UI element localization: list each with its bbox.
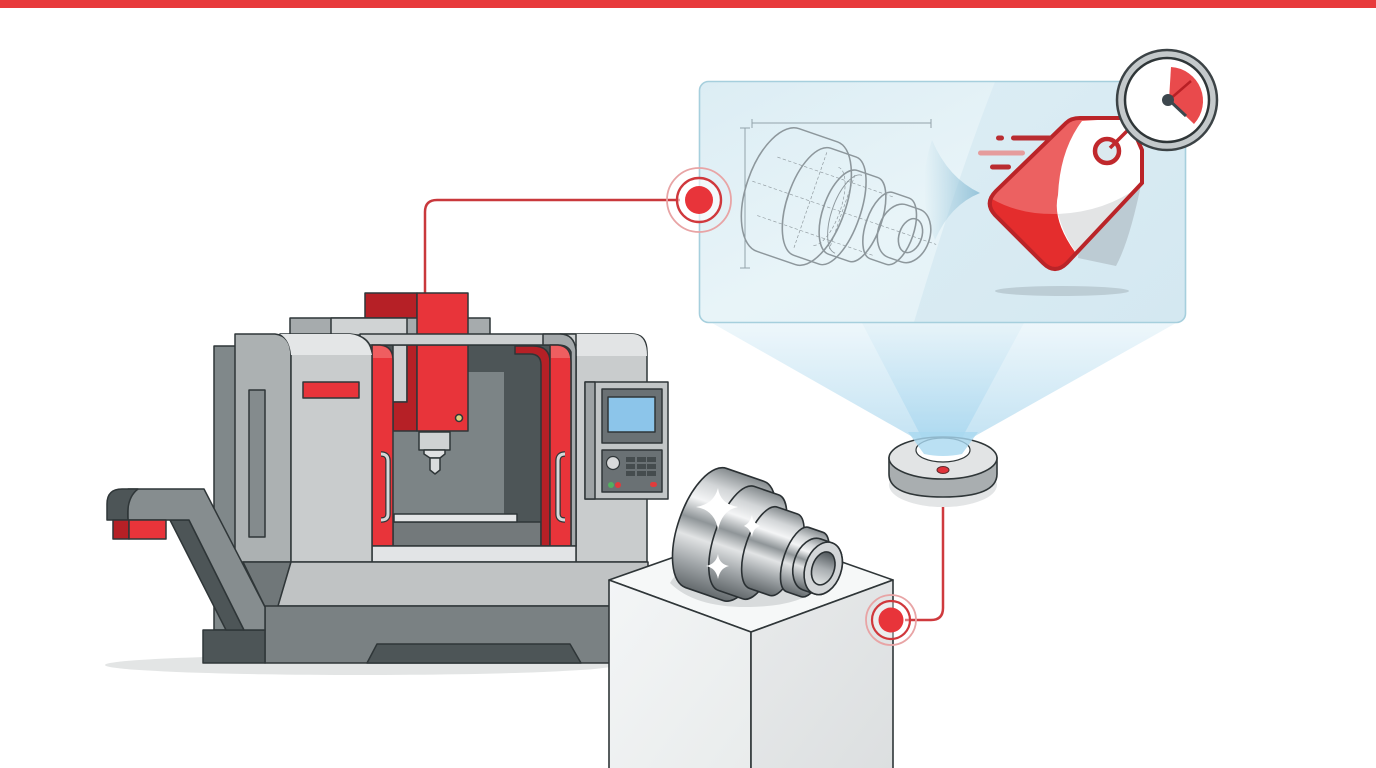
crossbar <box>360 334 576 546</box>
top red bar <box>0 0 1376 8</box>
machined metal part <box>659 459 861 634</box>
machine shadow <box>105 655 615 675</box>
spindle front <box>417 345 468 431</box>
work table <box>394 514 517 522</box>
pedestal <box>609 530 893 768</box>
conveyor red bin <box>113 520 129 539</box>
lower base <box>265 606 615 663</box>
spindle head rear <box>365 293 417 335</box>
part shadow <box>670 571 818 607</box>
connector: projector to pedestal <box>905 497 943 620</box>
node: pedestal target <box>866 595 916 645</box>
spindle side <box>393 345 417 431</box>
blueprint dimension lines <box>740 119 931 268</box>
connector: machine to screen <box>425 200 680 294</box>
light column <box>393 345 407 402</box>
stopwatch icon <box>1117 50 1217 150</box>
tag eyelet <box>1095 139 1119 163</box>
tag ground shadow <box>995 286 1129 296</box>
right housing <box>560 334 647 562</box>
sparkles <box>696 488 760 579</box>
price tag <box>990 118 1142 269</box>
base wedge <box>243 562 291 607</box>
right door red <box>515 345 571 546</box>
left side panel <box>235 334 291 562</box>
blueprint wireframe part <box>727 118 957 306</box>
sill <box>372 546 576 562</box>
panel: holographic screen <box>700 82 1186 322</box>
speed lines <box>978 136 1052 170</box>
machine opening interior <box>372 345 576 546</box>
keypad <box>606 456 657 488</box>
back column <box>214 346 244 630</box>
upper base <box>278 562 648 606</box>
side slot <box>249 390 265 537</box>
top cover <box>290 318 490 335</box>
projection beam <box>712 323 1176 440</box>
screen <box>608 397 655 432</box>
front door panel <box>280 334 372 562</box>
control panel <box>585 382 668 499</box>
red badge <box>303 382 359 398</box>
base recess <box>367 644 581 663</box>
CNC machine <box>107 293 668 663</box>
foot <box>203 630 265 663</box>
projector device <box>889 432 997 507</box>
chip conveyor <box>107 489 265 630</box>
spindle head front <box>417 293 468 335</box>
left door red <box>372 345 393 546</box>
tool holder <box>419 432 450 474</box>
node: screen target <box>667 168 731 232</box>
